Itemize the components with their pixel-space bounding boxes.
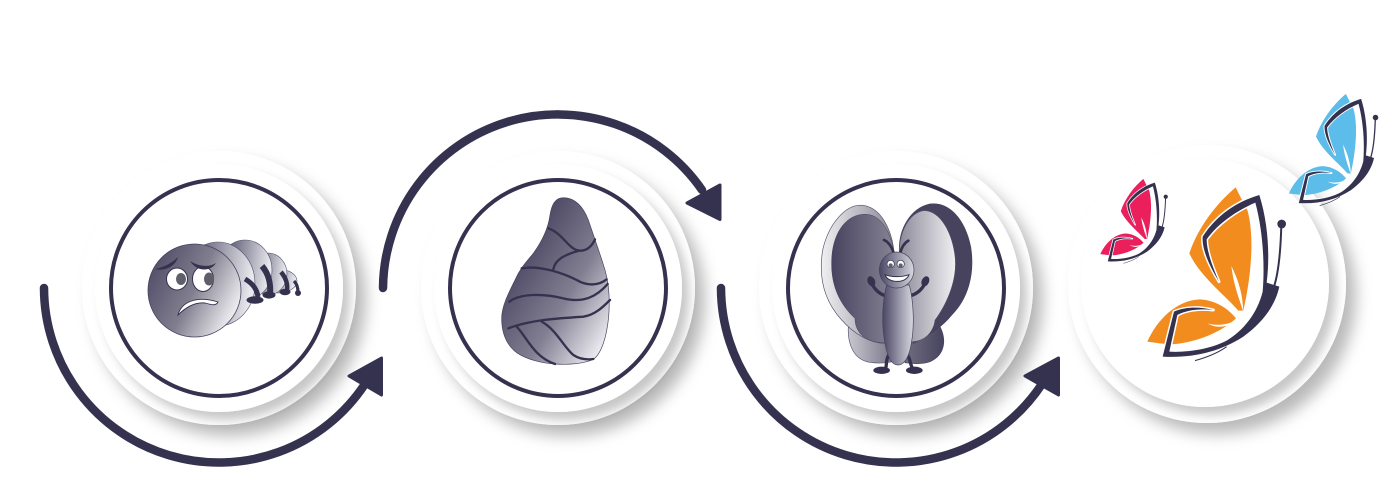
icon: cocoon xyxy=(502,198,610,364)
icon: caterpillar xyxy=(148,240,301,337)
icon: red butterfly xyxy=(1100,179,1168,263)
arrow: emerging to adult xyxy=(721,288,1058,463)
panel: caterpillar disk xyxy=(82,151,356,425)
arrow: caterpillar to cocoon xyxy=(44,288,382,463)
panel: winged insect disk xyxy=(759,151,1033,425)
panel: cocoon disk xyxy=(421,151,695,425)
arrow: cocoon to butterfly xyxy=(383,114,720,288)
icon: orange butterfly xyxy=(1147,187,1286,361)
icon: emerging butterfly xyxy=(821,204,972,374)
panel: butterflies disk xyxy=(1068,145,1346,423)
icon: blue butterfly xyxy=(1289,94,1378,206)
